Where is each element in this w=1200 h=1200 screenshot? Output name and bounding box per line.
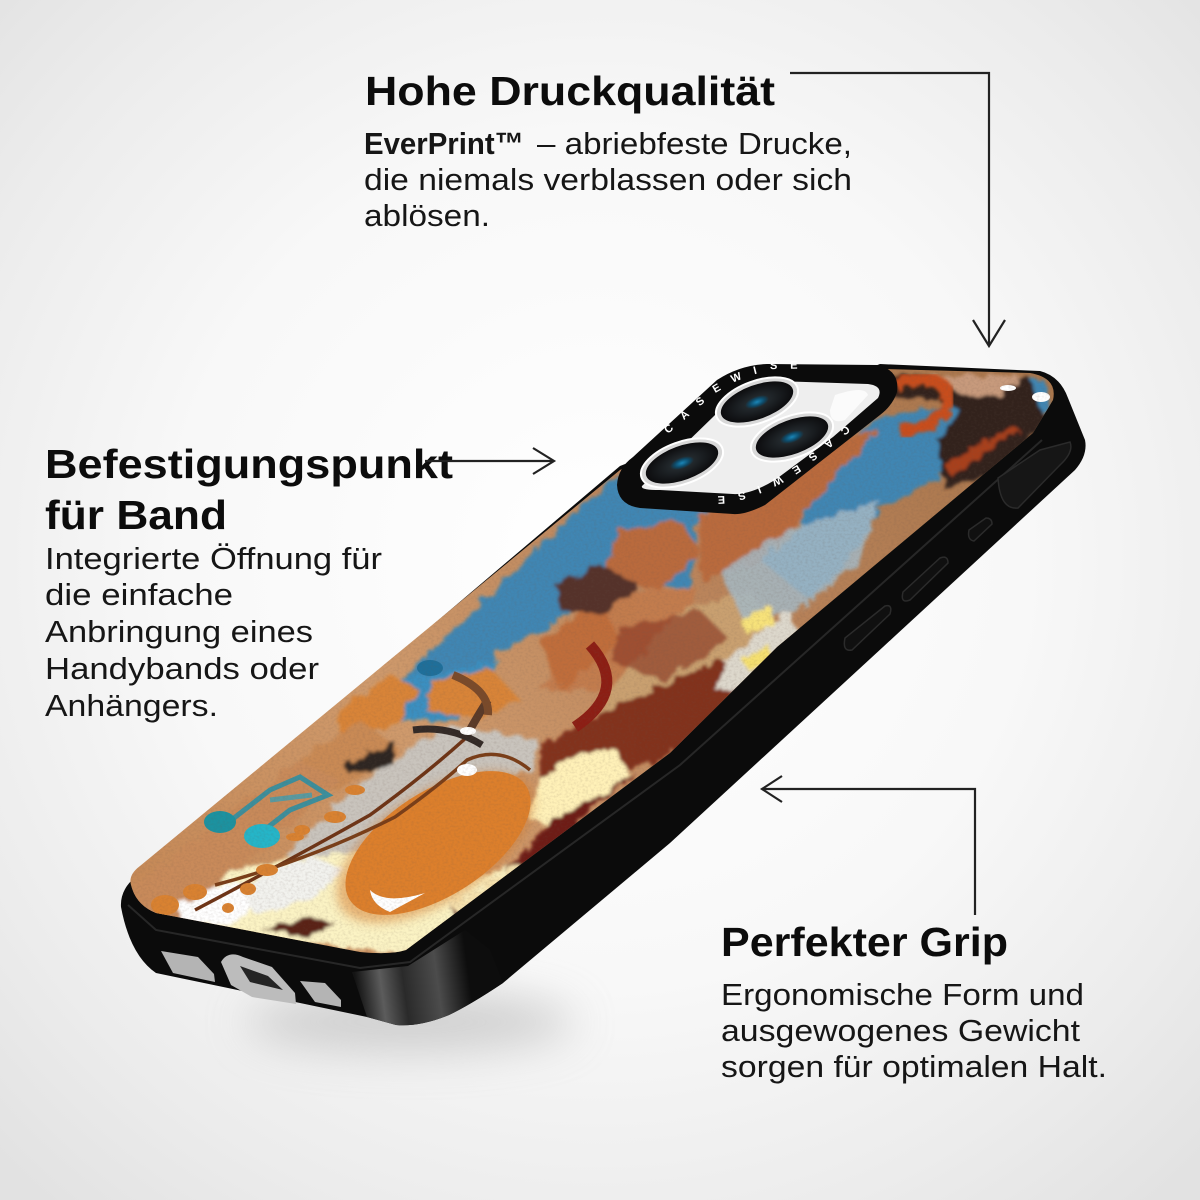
art: mid dark smudges [555, 565, 640, 615]
art: cream and white lower area [202, 850, 508, 954]
callout: grip [721, 919, 1107, 1084]
art: music note [233, 774, 334, 826]
art: orange disc [330, 766, 538, 930]
art: MagSafe rings [195, 645, 607, 910]
lens left [634, 429, 730, 497]
heading: print quality: Hohe Druckqualität [365, 68, 775, 114]
arrow: print quality [790, 73, 1005, 346]
art: dark brown top right [880, 375, 1045, 490]
body text: print quality: EverPrint™ [364, 126, 524, 161]
bottom corner highlight [352, 930, 503, 1025]
heading: strap attachment: Befestigungspunkt [45, 441, 453, 487]
body text: strap attachment [45, 541, 382, 723]
side buttons [844, 442, 1071, 650]
camera bump [617, 364, 898, 514]
art: grey centre [285, 723, 542, 862]
callout: print quality [364, 68, 852, 233]
art: dark red splash [450, 770, 640, 925]
brand ring text bottom: CASEWISE [718, 426, 850, 504]
art: white reflections [715, 610, 800, 690]
arrow: strap attachment [425, 448, 554, 474]
body text: grip: Ergonomische Form und [721, 977, 1084, 1012]
brand ring text top: CASEWISE [664, 364, 798, 432]
heading: grip: Perfekter Grip [721, 919, 1008, 965]
body text: strap attachment: Anhängers. [45, 688, 218, 723]
heading: strap attachment: für Band [45, 492, 227, 538]
art: rust and tan patches [540, 430, 880, 690]
phone with printed case [120, 364, 1086, 1026]
art: blue washes [340, 380, 1050, 720]
lens top [709, 368, 805, 436]
heading: strap attachment [45, 441, 453, 538]
body text: print quality [364, 126, 852, 233]
art: paint dots [151, 785, 365, 915]
body text: print quality: ablösen. [364, 198, 490, 233]
bottom ports [161, 951, 341, 1007]
lens right [744, 403, 840, 471]
art: left warm wash [130, 760, 340, 920]
phone shadow [245, 992, 575, 1052]
art: orange splashes [302, 664, 521, 790]
art: pale grey streak [720, 500, 880, 625]
case body [121, 364, 1086, 1025]
callout: strap attachment [45, 441, 453, 723]
arrow: grip [762, 776, 975, 915]
body text: grip [721, 977, 1107, 1084]
art: yellow highlights [740, 605, 775, 635]
body text: strap attachment: die einfache [45, 577, 233, 612]
body text: strap attachment: Integrierte Öffnung für [45, 541, 382, 576]
printed art [130, 369, 1054, 954]
body text: print quality: – abriebfeste Drucke, [537, 126, 852, 161]
art: dark swoosh [342, 742, 396, 773]
art: orange-red ring [895, 379, 948, 432]
body text: grip: sorgen für optimalen Halt. [721, 1049, 1107, 1084]
art: white flecks top right [1000, 385, 1016, 391]
body text: grip: ausgewogenes Gewicht [721, 1013, 1080, 1048]
body text: print quality: die niemals verblassen oder sich [364, 162, 852, 197]
art: paint grain [132, 372, 1052, 953]
camera window [642, 381, 880, 494]
art: tan area [600, 594, 764, 715]
case rim line [128, 440, 1042, 968]
body text: strap attachment: Anbringung eines [45, 614, 313, 649]
body text: strap attachment: Handybands oder [45, 651, 319, 686]
